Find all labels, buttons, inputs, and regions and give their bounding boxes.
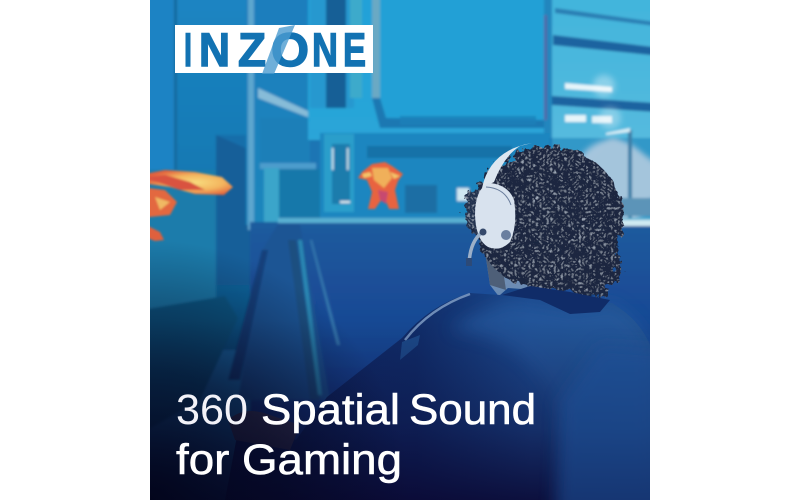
- lower structure: [320, 133, 550, 218]
- game scene background: [130, 0, 670, 500]
- headline: [176, 386, 536, 484]
- infographic canvas: [150, 0, 650, 500]
- logo letters: O: [271, 23, 309, 76]
- photo: gamer in game scene: [130, 0, 670, 500]
- hand on controller: [228, 411, 300, 450]
- shirt light recovery: [548, 356, 650, 500]
- headline line 1: Spatial: [261, 386, 400, 434]
- sweatshirt: [231, 288, 552, 476]
- central building: [308, 0, 553, 140]
- floor: [228, 216, 650, 440]
- corridor: [245, 0, 318, 232]
- headset microphone: [468, 232, 482, 258]
- shoulder seam: [405, 294, 470, 340]
- logo letters: N: [312, 23, 338, 76]
- logo white plate: [175, 25, 373, 73]
- bottom dark gradient overlay: [150, 320, 650, 500]
- shirt collar: [502, 286, 610, 314]
- logo letters: I: [184, 23, 192, 76]
- logo letters: N: [199, 23, 230, 76]
- INZONE logo: [175, 23, 373, 76]
- thermal flying enemy: [140, 170, 233, 241]
- left dark gradient overlay: [150, 252, 365, 500]
- neck: [486, 258, 528, 295]
- headset ear cup: [475, 183, 515, 249]
- headline line 1: Sound: [409, 386, 536, 434]
- headline line 2: for Gaming: [176, 436, 402, 484]
- headset band: [482, 143, 532, 188]
- right building: [550, 0, 650, 220]
- shirt shading: [459, 296, 638, 385]
- thermal robot: [358, 162, 403, 209]
- headline line 1: 360: [176, 386, 248, 434]
- logo letters: [184, 23, 366, 76]
- logo slash mark: [262, 25, 295, 74]
- headline line 1: [176, 386, 536, 434]
- gamer: [225, 143, 650, 500]
- logo letters: Z: [238, 23, 266, 76]
- hair: [464, 146, 623, 298]
- logo letters: E: [343, 23, 366, 76]
- left wall: [150, 0, 251, 350]
- lower left wall: [150, 296, 236, 418]
